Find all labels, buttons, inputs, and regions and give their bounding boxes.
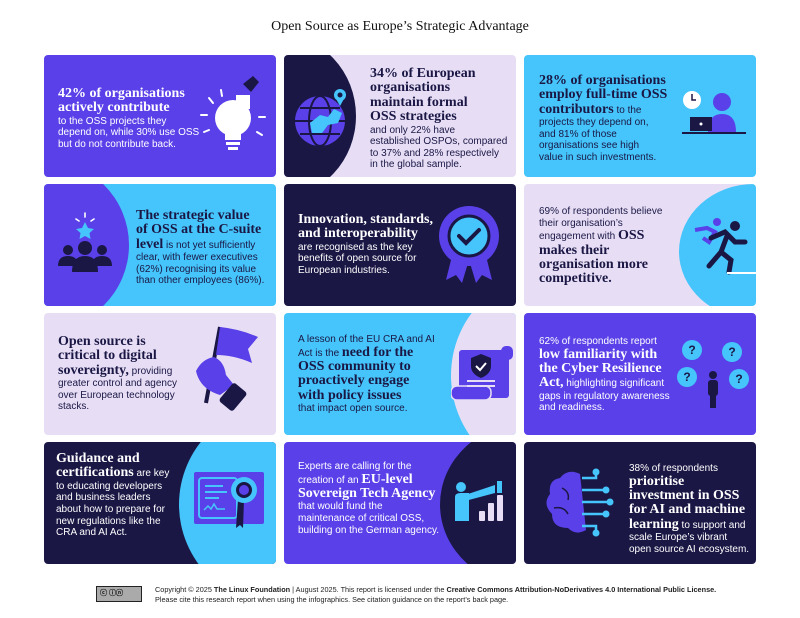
text: CRA: and readiness. bbox=[539, 402, 605, 413]
panel: competitive bbox=[524, 184, 756, 306]
text: AI: scale Europe’s vibrant bbox=[629, 532, 727, 543]
text: AI: open source AI ecosystem. bbox=[629, 544, 749, 555]
icon: questions: ? bbox=[683, 370, 691, 384]
text: competitive: competitive. bbox=[539, 271, 612, 286]
text: C-suite: of OSS at the C-suite bbox=[136, 222, 261, 237]
text: AI: 38% of respondents bbox=[629, 463, 718, 474]
text: agency bbox=[298, 461, 439, 536]
text: sovereignty: Open source is bbox=[58, 334, 146, 349]
text: contribute bbox=[58, 86, 199, 150]
text: guidance: about how to prepare for bbox=[56, 504, 165, 515]
icon: runner bbox=[694, 218, 756, 274]
text: copyright: Copyright © 2025 The Linux Foundation | August 2025. This report is licensed under the Creative Commons Attribution-NoDerivatives 4.0 International Public License. bbox=[155, 585, 716, 594]
icon: questions: ? bbox=[735, 372, 743, 386]
icon: people star bbox=[58, 212, 112, 272]
text: C-suite: The strategic value bbox=[136, 208, 250, 223]
title: Open Source as Europe’s Strategic Advantage bbox=[271, 19, 529, 34]
text: guidance: to educating developers bbox=[56, 481, 162, 492]
icon: questions: ? bbox=[688, 343, 696, 357]
text: copyright: Please cite this research report when using the infographics. See citation guidance on the report’s back page. bbox=[155, 595, 508, 604]
footer bbox=[96, 585, 716, 604]
text: strategies: OSS strategies bbox=[370, 109, 457, 124]
panel: policy bbox=[284, 313, 516, 435]
text: C-suite: (62%) recognising its value bbox=[136, 264, 256, 275]
icon: brain bbox=[546, 468, 614, 536]
text: CRA: the Cyber Resilience bbox=[539, 361, 662, 376]
text: guidance: new regulations like the bbox=[56, 516, 161, 527]
text: AI: investment in OSS bbox=[629, 488, 739, 503]
text: guidance: certifications are key bbox=[56, 465, 169, 480]
text: AI: for AI and machine bbox=[629, 502, 745, 517]
text: strategies: established OSPOs, compared bbox=[370, 136, 507, 147]
text: agency: Sovereign Tech Agency bbox=[298, 486, 435, 501]
text: CRA: 62% of respondents report bbox=[539, 336, 657, 347]
panel: contribute bbox=[44, 55, 276, 177]
text: innovation: are recognised as the key bbox=[298, 242, 413, 253]
text: agency: maintenance of critical OSS, bbox=[298, 513, 424, 524]
text: CRA: gaps in regulatory awareness bbox=[539, 391, 670, 402]
text: contributors bbox=[539, 73, 667, 163]
text: innovation bbox=[298, 212, 433, 276]
text: competitive bbox=[539, 206, 662, 286]
icon: questions: ? bbox=[728, 345, 736, 359]
text: contribute: depend on, while 30% use OSS bbox=[58, 127, 199, 138]
text: AI bbox=[629, 463, 749, 555]
text: guidance: CRA and AI Act. bbox=[56, 527, 127, 538]
text: C-suite: clear, with fewer executives bbox=[136, 252, 258, 263]
text: strategies: to 37% and 28% respectively bbox=[370, 148, 499, 159]
panel: CRA familiarity bbox=[524, 313, 756, 435]
text: innovation: Innovation, standards, bbox=[298, 212, 433, 227]
text: CRA: low familiarity with bbox=[539, 347, 657, 362]
text: strategies bbox=[370, 66, 507, 170]
text: policy: proactively engage bbox=[298, 373, 409, 388]
text: strategies: in the global sample. bbox=[370, 159, 462, 170]
text: policy: that impact open source. bbox=[298, 403, 408, 414]
panel: OSS strategies bbox=[284, 55, 516, 177]
text: contributors: organisations see high bbox=[539, 140, 639, 151]
panel: full-time contributors bbox=[524, 55, 756, 177]
text: AI: learning to support and bbox=[629, 517, 746, 532]
panel: sovereignty bbox=[44, 313, 276, 435]
text: strategies: 34% of European bbox=[370, 66, 476, 81]
text: sovereignty: stacks. bbox=[58, 401, 89, 412]
text: CRA: Act, highlighting significant bbox=[539, 375, 664, 390]
text: contributors: contributors to the bbox=[539, 102, 641, 117]
text: AI: prioritise bbox=[629, 474, 684, 489]
text: competitive: their organisation’s bbox=[539, 218, 623, 229]
text: contributors: 28% of organisations bbox=[539, 73, 666, 88]
icon: cc license: ⓒ ⓘⓝ bbox=[100, 590, 123, 597]
panel: AI ML bbox=[524, 442, 756, 564]
text: sovereignty: sovereignty, providing bbox=[58, 363, 172, 378]
text: policy bbox=[298, 334, 435, 414]
icon: badge bbox=[439, 206, 499, 283]
text: sovereignty: over European technology bbox=[58, 390, 175, 401]
text: contribute: actively contribute bbox=[58, 100, 170, 115]
text: contributors: and 81% of those bbox=[539, 129, 617, 140]
text: sovereignty: greater control and agency bbox=[58, 378, 177, 389]
text: agency: Experts are calling for the bbox=[298, 461, 411, 472]
icon: person laptop bbox=[682, 91, 746, 134]
text: competitive: 69% of respondents believe bbox=[539, 206, 662, 217]
icon: scroll shield bbox=[451, 346, 513, 400]
text: strategies: organisations bbox=[370, 80, 450, 95]
text: C-suite: level is not yet sufficiently bbox=[136, 237, 255, 252]
panel: C-suite bbox=[44, 184, 276, 306]
text: policy: A lesson of the EU CRA and AI bbox=[298, 334, 435, 345]
icon: telescope chart bbox=[455, 481, 503, 521]
text: contribute: 42% of organisations bbox=[58, 86, 185, 101]
text: sovereignty bbox=[58, 334, 177, 412]
text: agency: that would fund the bbox=[298, 501, 383, 512]
text: strategies: and only 22% have bbox=[370, 125, 455, 136]
text: C-suite bbox=[136, 208, 264, 286]
icon: lightbulb bbox=[200, 76, 266, 150]
text: guidance: Guidance and bbox=[56, 451, 140, 466]
icon: cc license bbox=[96, 586, 142, 602]
text: competitive: makes their bbox=[539, 243, 609, 258]
panel: guidance bbox=[44, 442, 276, 564]
panel: innovation bbox=[284, 184, 516, 306]
text: guidance bbox=[56, 451, 170, 538]
icon: questions bbox=[677, 340, 749, 408]
text: contribute: to the OSS projects they bbox=[58, 116, 166, 127]
text: policy: OSS community to bbox=[298, 359, 411, 374]
text: CRA bbox=[539, 336, 670, 413]
text: agency: building on the German agency. bbox=[298, 525, 439, 536]
text: competitive: engagement with OSS bbox=[539, 228, 644, 243]
text: contributors: projects they depend on, bbox=[539, 117, 649, 128]
text: contributors: employ full-time OSS bbox=[539, 87, 667, 102]
icon: certificate bbox=[194, 472, 264, 528]
icon: flag hand bbox=[196, 326, 258, 411]
panel: sovereign tech agency bbox=[284, 442, 516, 564]
text: innovation: European industries. bbox=[298, 265, 390, 276]
text: innovation: and interoperability bbox=[298, 226, 418, 241]
text: policy: Act is the need for the bbox=[298, 345, 413, 360]
text: copyright bbox=[155, 585, 716, 604]
text: policy: with policy issues bbox=[298, 388, 401, 403]
text: contributors: value in such investments. bbox=[539, 152, 656, 163]
text: competitive: organisation more bbox=[539, 257, 648, 272]
text: sovereignty: critical to digital bbox=[58, 348, 157, 363]
text: innovation: benefits of open source for bbox=[298, 253, 416, 264]
icon: globe bbox=[295, 89, 346, 146]
text: contribute: but do not contribute back. bbox=[58, 139, 176, 150]
text: strategies: maintain formal bbox=[370, 95, 468, 110]
text: C-suite: than other employees (86%). bbox=[136, 275, 264, 286]
text: guidance: and business leaders bbox=[56, 492, 151, 503]
text: agency: creation of an EU-level bbox=[298, 472, 413, 487]
